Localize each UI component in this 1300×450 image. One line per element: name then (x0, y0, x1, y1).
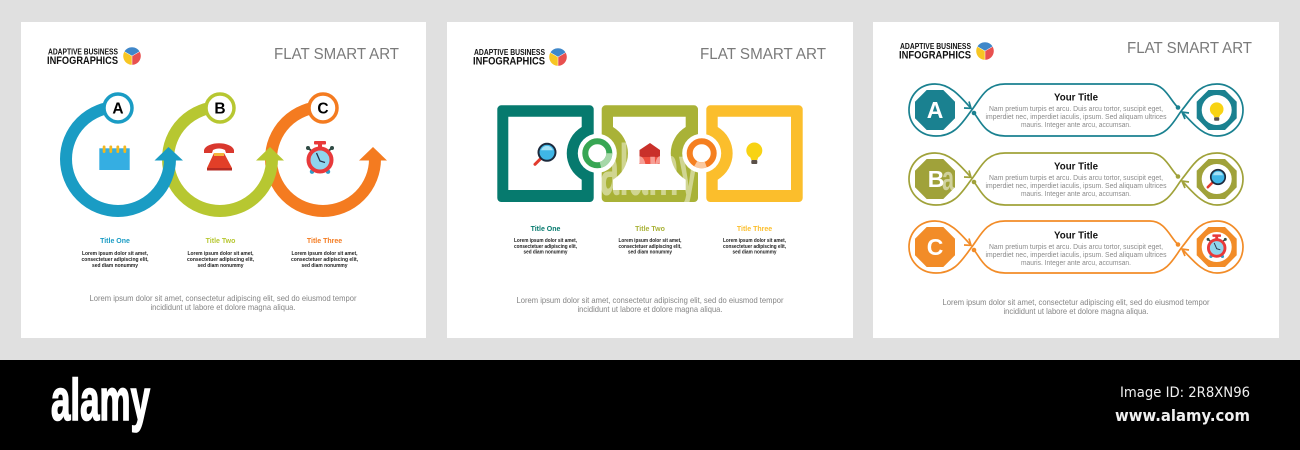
caption: title one: sed diam nonummy (524, 250, 568, 256)
footer text: incididunt ut labore et dolore magna aliqua. (578, 304, 722, 314)
green arrow B: B (214, 100, 226, 118)
caption: title two: Lorem ipsum dolor sit amet, (618, 238, 682, 244)
caption: title three: consectetuer adipiscing elit, (291, 257, 359, 263)
icon: magnifier (535, 144, 556, 164)
row C: C (927, 234, 943, 260)
footer text (942, 297, 1210, 316)
blue arrow A (66, 94, 183, 211)
caption: title one: consectetuer adipiscing elit, (82, 257, 149, 263)
caption: title two: Title Two (635, 226, 665, 233)
logo: ADAPTIVE BUSINESS (474, 48, 546, 57)
caption: title two: sed diam nonummy (198, 263, 244, 269)
caption: title two: consectetuer adipiscing elit, (618, 244, 682, 250)
row C (909, 221, 1243, 273)
row B text (986, 160, 1167, 198)
caption: title two: Title Two (206, 238, 235, 245)
logo (47, 47, 141, 67)
teal frame (497, 105, 594, 202)
orange arrow C (271, 94, 387, 211)
row C text: Nam pretium turpis et arcu. Duis arcu tortor, suscipit eget, (989, 244, 1163, 251)
caption: title two: sed diam nonummy (628, 250, 672, 256)
panel: circular arrows (21, 22, 426, 338)
row A (909, 84, 1243, 136)
caption: title one: consectetuer adipiscing elit, (514, 244, 578, 250)
website: www.alamy.com (1115, 406, 1250, 425)
black footer bar (0, 360, 1300, 450)
row A text: imperdiet nec, imperdiet iaculis, ipsum. Sed aliquam ultrices (986, 114, 1167, 121)
row B text: imperdiet nec, imperdiet iaculis, ipsum. Sed aliquam ultrices (986, 183, 1167, 190)
row B text: mauris. Integer ante arcu, accumsan. (1021, 191, 1131, 198)
row B (909, 153, 1243, 205)
blue arrow A: A (112, 100, 124, 118)
orange arrow C: C (317, 100, 329, 118)
caption: title three (291, 238, 359, 269)
footer text (516, 295, 784, 314)
icon: alarm clock (306, 141, 334, 174)
caption: title three: Lorem ipsum dolor sit amet, (723, 238, 787, 244)
heading: FLAT SMART ART (1127, 40, 1252, 57)
heading: FLAT SMART ART (700, 46, 826, 63)
row B text: Your Title (1054, 160, 1098, 172)
row C text: Your Title (1054, 230, 1098, 242)
row C text: mauris. Integer ante arcu, accumsan. (1021, 260, 1131, 267)
orange ring connector (682, 134, 721, 173)
caption: title one: Lorem ipsum dolor sit amet, (82, 251, 149, 257)
caption: title three (723, 226, 787, 256)
green ring connector (578, 134, 617, 173)
logo: INFOGRAPHICS (899, 50, 971, 62)
caption: title two (187, 238, 255, 269)
caption: title three: sed diam nonummy (732, 250, 777, 256)
footer text: incididunt ut labore et dolore magna aliqua. (150, 302, 296, 312)
row B text: Nam pretium turpis et arcu. Duis arcu tortor, suscipit eget, (989, 175, 1163, 182)
caption: title three: consectetuer adipiscing elit, (723, 244, 787, 250)
logo (473, 48, 567, 68)
caption: title two: consectetuer adipiscing elit, (187, 257, 255, 263)
caption: title one: Lorem ipsum dolor sit amet, (514, 238, 578, 244)
caption: title one (82, 238, 149, 269)
footer text: incididunt ut labore et dolore magna aliqua. (1004, 306, 1148, 316)
alamy wordmark: alamy (51, 368, 150, 433)
olive frame (602, 105, 698, 202)
row A text: Nam pretium turpis et arcu. Duis arcu tortor, suscipit eget, (989, 106, 1163, 113)
icon: notepad (99, 146, 130, 170)
logo: ADAPTIVE BUSINESS (900, 42, 972, 51)
row A text: mauris. Integer ante arcu, accumsan. (1021, 122, 1131, 129)
page background (0, 0, 1300, 360)
panel: puzzle frames (447, 22, 853, 338)
logo (899, 42, 994, 62)
panel: puzzle frames: alamy (600, 131, 698, 211)
caption: title two (618, 226, 682, 256)
footer text: Lorem ipsum dolor sit amet, consectetur adipiscing elit, sed do eiusmod tempor (516, 295, 784, 305)
caption: title one: Title One (100, 238, 130, 245)
caption: title two: Lorem ipsum dolor sit amet, (188, 251, 254, 257)
row A: A (927, 97, 943, 123)
caption: title three: Title Three (737, 226, 772, 233)
icon: light bulb (746, 142, 762, 164)
footer text: Lorem ipsum dolor sit amet, consectetur adipiscing elit, sed do eiusmod tempor (90, 293, 357, 303)
row A text (986, 92, 1167, 129)
green arrow B (168, 94, 284, 211)
logo: INFOGRAPHICS (47, 55, 118, 67)
heading: FLAT SMART ART (274, 46, 399, 63)
caption: title one (514, 226, 578, 256)
icon: open envelope (640, 143, 660, 164)
icon: telephone (204, 143, 234, 170)
caption: title three: Lorem ipsum dolor sit amet, (292, 251, 358, 257)
image id: Image ID: 2R8XN96 (1120, 385, 1250, 401)
row B: B (928, 166, 944, 192)
caption: title three: sed diam nonummy (302, 263, 348, 269)
row A text: Your Title (1054, 92, 1098, 104)
footer text (90, 293, 357, 312)
caption: title three: Title Three (307, 238, 342, 245)
yellow frame (706, 105, 803, 202)
logo: INFOGRAPHICS (473, 56, 545, 68)
caption: title one: sed diam nonummy (92, 263, 138, 269)
footer text: Lorem ipsum dolor sit amet, consectetur adipiscing elit, sed do eiusmod tempor (942, 297, 1210, 307)
caption: title one: Title One (531, 226, 561, 233)
row C text (986, 230, 1167, 267)
logo: ADAPTIVE BUSINESS (48, 48, 119, 56)
row C text: imperdiet nec, imperdiet iaculis, ipsum. Sed aliquam ultrices (986, 252, 1167, 259)
row B: a (942, 160, 955, 198)
panel: infinity rows (873, 22, 1279, 338)
